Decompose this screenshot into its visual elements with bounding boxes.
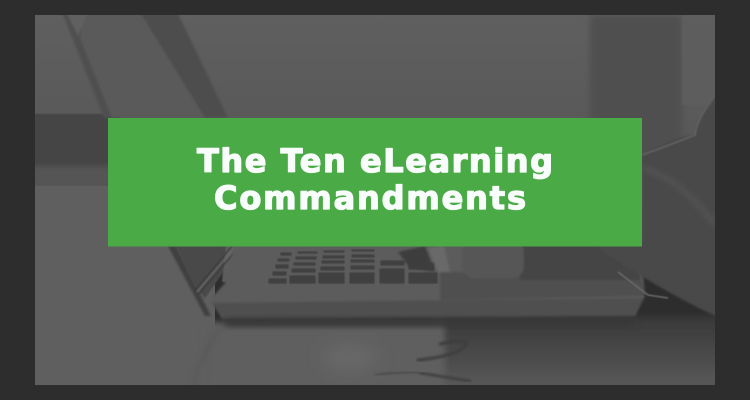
dark band behind laptop on left bbox=[35, 114, 112, 166]
title banner bbox=[108, 118, 642, 246]
desk left bbox=[30, 186, 215, 391]
laptop hinge and edge bbox=[177, 246, 234, 298]
green banner panel bbox=[108, 118, 642, 246]
title text line 1: The Ten eLearning bbox=[197, 142, 553, 180]
laptop base bbox=[210, 244, 645, 327]
desk lower right bbox=[442, 318, 715, 385]
keyboard bbox=[268, 249, 438, 284]
desk lower centre bbox=[205, 322, 445, 390]
mug and hand blur near keyboard bbox=[398, 246, 524, 274]
laptop screen back bbox=[62, 12, 232, 316]
person's arm on the right bbox=[618, 98, 715, 316]
cable and desk objects at bottom bbox=[342, 341, 471, 382]
wall bbox=[35, 15, 715, 255]
title text line 2: Commandments bbox=[214, 179, 526, 217]
